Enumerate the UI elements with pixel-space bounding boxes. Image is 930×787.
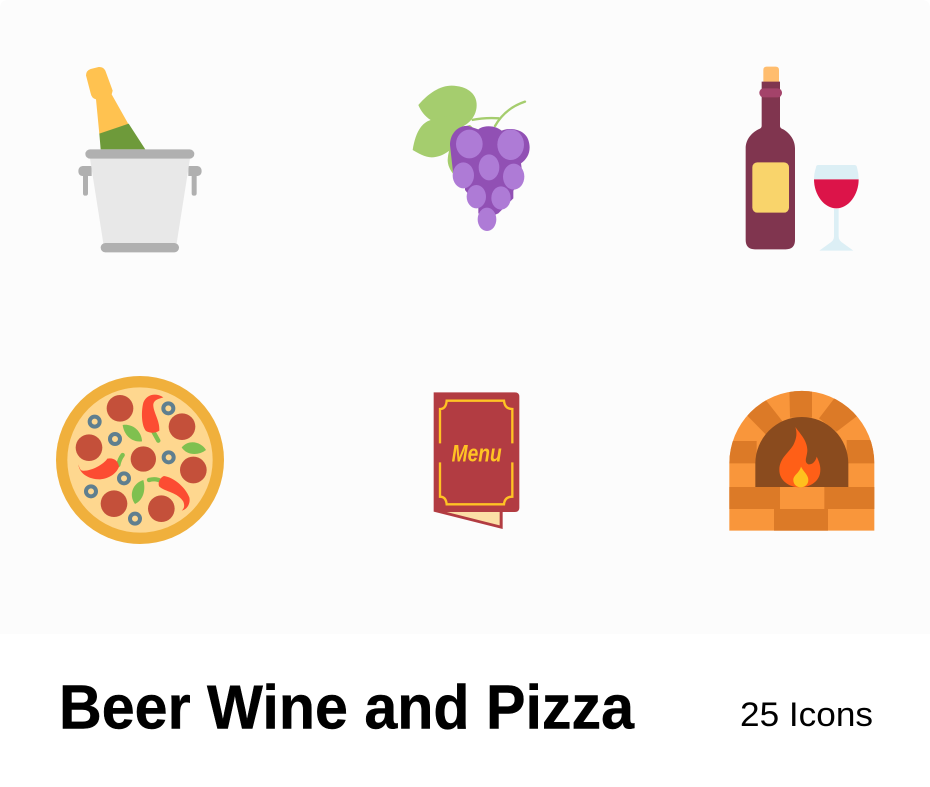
infographic canvas	[56, 66, 874, 730]
icon: grapes	[413, 86, 530, 231]
icon: wine bottle and glass	[746, 67, 859, 251]
icon: menu card: Menu	[452, 441, 502, 468]
icon: menu card	[434, 392, 519, 529]
icon count label: 25 Icons	[740, 696, 873, 734]
icon: brick pizza oven	[727, 388, 877, 531]
title: Beer Wine and Pizza	[59, 674, 634, 742]
icon: pizza	[56, 376, 224, 544]
icon: champagne bucket	[78, 67, 202, 252]
